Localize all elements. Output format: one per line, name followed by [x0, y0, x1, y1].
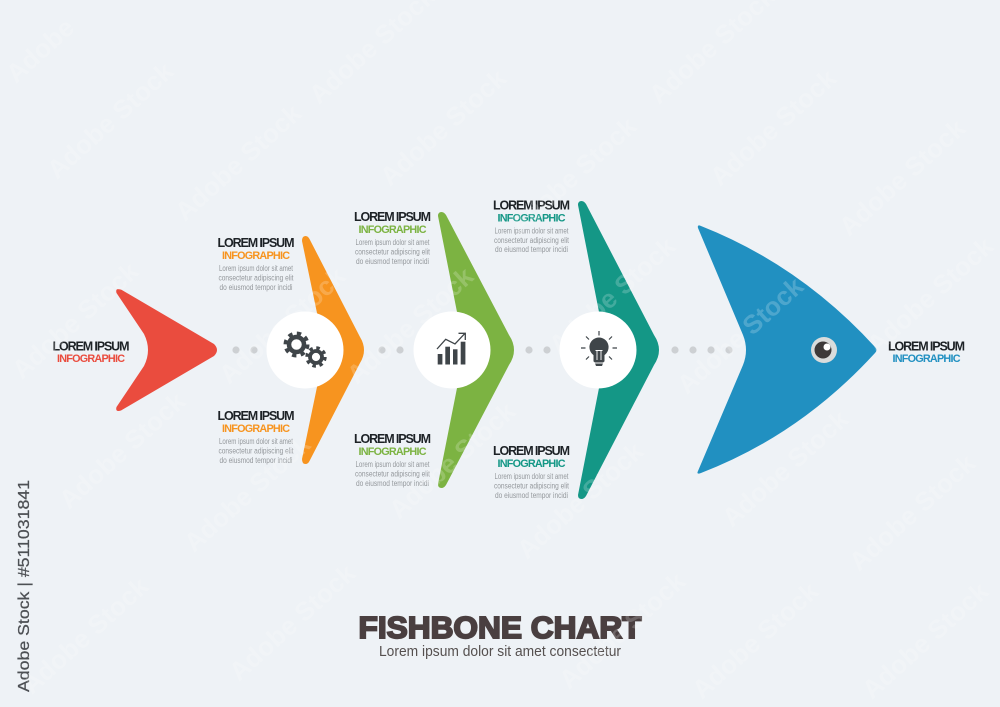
text block: green bottom: LOREM IPSUM — [354, 432, 431, 446]
watermark: Adobe Stock — [833, 113, 971, 242]
text block: green top: INFOGRAPHIC — [358, 224, 427, 236]
watermark: Adobe Stock — [223, 558, 361, 687]
text block: orange top: LOREM IPSUM — [218, 236, 294, 250]
connector dots — [232, 346, 733, 354]
title: FISHBONE CHART — [358, 610, 642, 645]
text block: orange top: consectetur adipiscing elit — [218, 274, 294, 282]
label: head: LOREM IPSUM — [888, 340, 965, 354]
text block: teal bottom: LOREM IPSUM — [493, 444, 570, 458]
watermark: Adobe Stock — [716, 404, 854, 533]
text block: orange top: INFOGRAPHIC — [222, 250, 290, 262]
watermark: Adobe Stock — [553, 566, 691, 695]
watermark: Adobe Stock — [16, 571, 154, 700]
text block: orange bottom: do eiusmod tempor incidi — [220, 456, 293, 465]
rib: orange — [302, 236, 364, 464]
icon: fish eye — [811, 337, 837, 363]
text block: teal bottom: do eiusmod tempor incidi — [495, 491, 568, 500]
text block: orange top: do eiusmod tempor incidi — [220, 283, 293, 292]
text block: green top — [354, 210, 431, 266]
watermark: Adobe Stock — [704, 63, 842, 192]
label: head: INFOGRAPHIC — [892, 353, 961, 365]
watermark: Adobe Stock — [374, 63, 512, 192]
label: head — [888, 340, 965, 365]
watermark: Adobe Stock — [383, 396, 521, 525]
fish tail: red arrow — [116, 289, 217, 411]
text block: green top: do eiusmod tempor incidi — [356, 257, 429, 266]
icon: gears — [286, 334, 325, 366]
label: tail — [52, 340, 130, 365]
watermark: Adobe Stock — [178, 429, 316, 558]
text block: teal top: INFOGRAPHIC — [498, 212, 566, 224]
watermark: Adobe Stock — [543, 231, 681, 360]
text block: orange bottom: LOREM IPSUM — [218, 409, 294, 423]
text block: orange bottom: Lorem ipsum dolor sit amet — [219, 437, 294, 446]
icon: light bulb — [581, 331, 617, 366]
circle with gears icon — [266, 312, 344, 388]
watermark: Adobe Stock — [686, 576, 824, 705]
icon: growth chart — [437, 333, 465, 364]
text block: teal top: Lorem ipsum dolor sit amet — [494, 226, 569, 236]
text block: green top: consectetur adipiscing elit — [355, 248, 431, 256]
subtitle: Lorem ipsum dolor sit amet consectetur — [379, 644, 621, 660]
text block: orange bottom: INFOGRAPHIC — [222, 423, 290, 435]
label: tail: LOREM IPSUM — [52, 340, 130, 354]
label: tail: INFOGRAPHIC — [57, 353, 125, 365]
watermark: Adobe Stock — [861, 231, 999, 360]
watermark: Adobe Stock — [843, 448, 981, 577]
text block: green bottom: INFOGRAPHIC — [358, 446, 427, 458]
text block: teal bottom — [493, 444, 570, 500]
watermark: Adobe Stock — [41, 56, 179, 185]
text block: green bottom: consectetur adipiscing elit — [355, 470, 431, 478]
rib: teal — [578, 201, 659, 499]
watermark: Adobe Stock — [53, 386, 191, 515]
text block: green top: Lorem ipsum dolor sit amet — [356, 238, 430, 247]
circle with chart icon — [414, 312, 490, 388]
text block: orange top: Lorem ipsum dolor sit amet — [219, 264, 294, 273]
stock id: Adobe Stock | #511031841 — [16, 480, 33, 692]
text block: green top: LOREM IPSUM — [354, 210, 431, 224]
watermark — [26, 200, 890, 682]
rib: green — [438, 212, 514, 488]
watermark: Adobe Stock — [504, 111, 642, 240]
watermark: Adobe Stock — [856, 576, 994, 705]
text block: green bottom: Lorem ipsum dolor sit amet — [356, 460, 430, 469]
watermark: Adobe Stock — [341, 261, 479, 390]
text block: teal bottom: Lorem ipsum dolor sit amet — [494, 472, 569, 481]
text block: teal top: LOREM IPSUM — [493, 198, 570, 212]
text block: orange bottom — [218, 409, 294, 465]
text block: teal top: consectetur adipiscing elit — [494, 236, 570, 245]
circle with light bulb icon — [560, 312, 636, 388]
text block: teal bottom: consectetur adipiscing elit — [494, 482, 570, 490]
watermark: Adobe Stock — [6, 256, 144, 385]
text block: teal bottom: INFOGRAPHIC — [498, 458, 566, 470]
fish head: blue — [697, 225, 876, 474]
text block: green bottom — [354, 432, 431, 488]
text block: orange bottom: consectetur adipiscing elit — [218, 446, 294, 456]
text block: teal top — [493, 198, 570, 254]
watermark: Adobe Stock — [671, 271, 809, 400]
watermark: Adobe Stock — [169, 98, 307, 227]
text block: orange top — [218, 236, 294, 292]
text block: green bottom: do eiusmod tempor incidi — [356, 479, 429, 488]
watermark: Adobe — [0, 12, 80, 89]
text block: teal top: do eiusmod tempor incidi — [495, 245, 568, 254]
watermark: Adobe Stock — [213, 261, 351, 390]
watermark: Adobe Stock — [511, 436, 649, 565]
